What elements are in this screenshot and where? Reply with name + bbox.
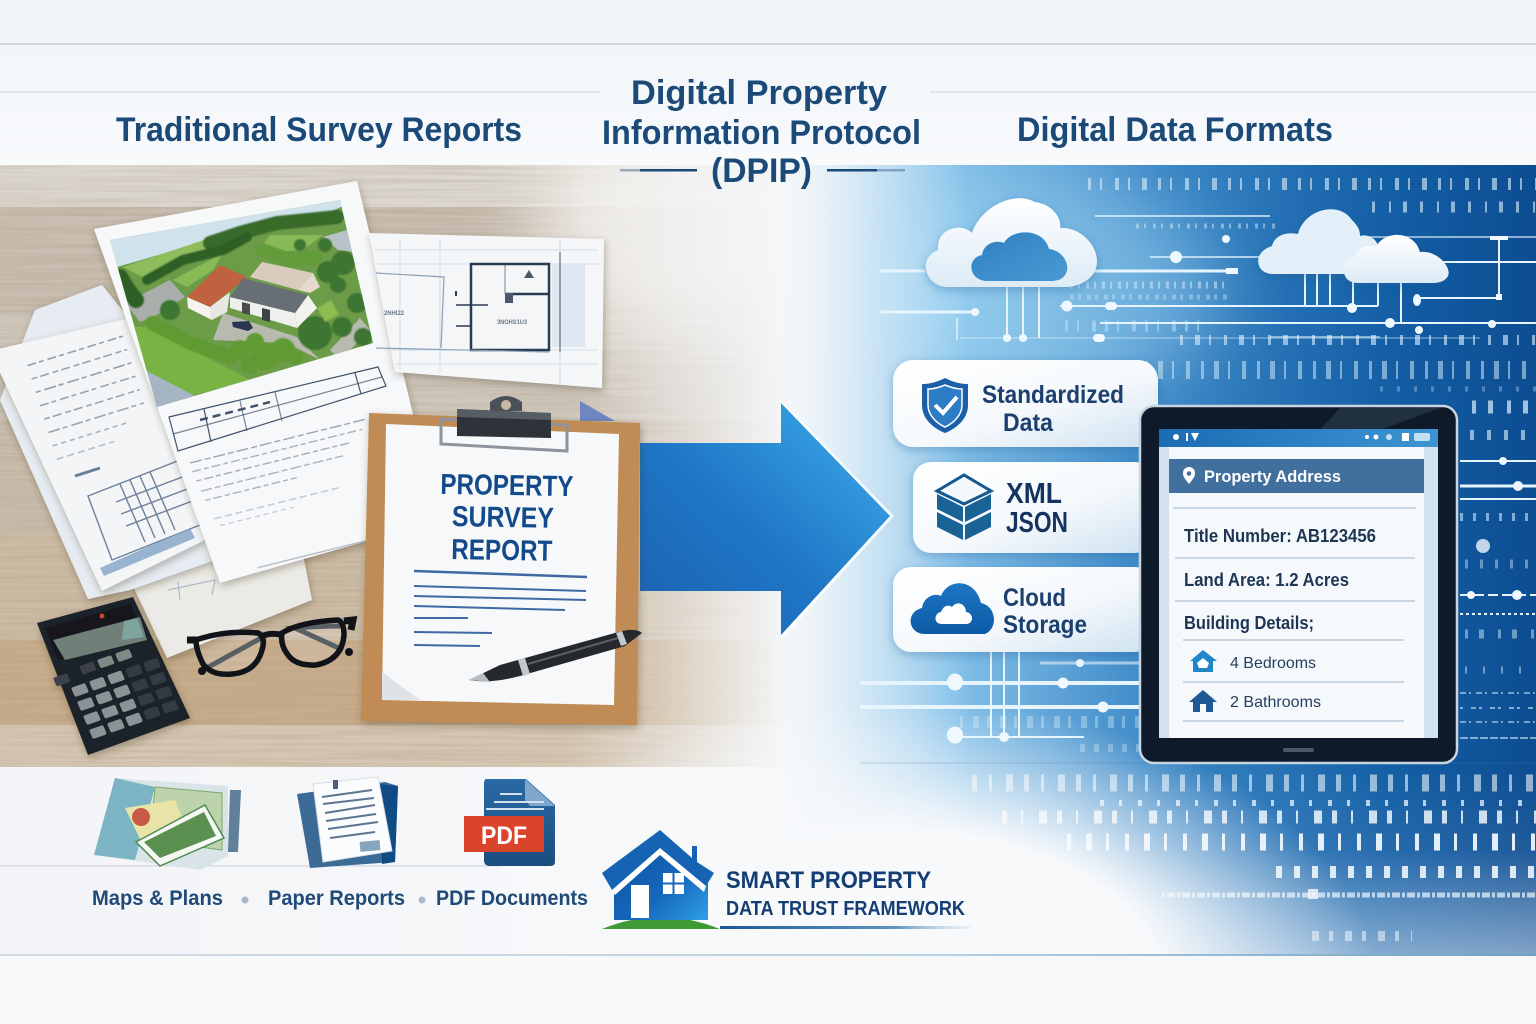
- heading: digital property information protocol: [602, 74, 921, 190]
- sheet: back lower: [130, 540, 312, 658]
- card: xml json: [913, 462, 1153, 553]
- heading: traditional survey reports: Traditional Survey Reports: [116, 111, 522, 149]
- icon: glasses: [187, 620, 353, 675]
- sheet: floor plan: [369, 233, 604, 388]
- heading: digital property information protocol: Information Protocol: [602, 114, 921, 152]
- report title: REPORT: [451, 534, 553, 568]
- sheet: back left: [0, 285, 300, 599]
- report title: [439, 469, 574, 568]
- icon: paper reports: [297, 777, 398, 868]
- heading: digital property information protocol: Digital Property: [631, 74, 887, 112]
- tick rows: [960, 184, 1536, 748]
- card: cloud storage: Storage: [1003, 611, 1087, 639]
- building: [187, 262, 320, 331]
- icon: pair of clouds: [1258, 209, 1449, 283]
- report paper: [382, 424, 619, 705]
- wide arrow: [580, 400, 894, 640]
- logo: smart property: DATA TRUST FRAMEWORK: [726, 898, 965, 920]
- report title: PROPERTY: [440, 469, 574, 503]
- icon: pdf documents: PDF: [481, 822, 527, 850]
- status bar: [1159, 429, 1438, 447]
- icon: bedrooms house: [1190, 650, 1217, 672]
- survey table: [169, 367, 386, 451]
- caption: paper reports: Paper Reports: [268, 887, 405, 910]
- card: standardized data: Standardized: [982, 381, 1124, 409]
- property details: 4 Bedrooms: [1230, 655, 1316, 672]
- nodes: [947, 235, 1523, 744]
- document stack: [0, 181, 604, 658]
- sheet: floor plan: 2NHI22: [384, 311, 405, 317]
- property details: Title Number: AB123456: [1184, 526, 1376, 546]
- icon: pen: [469, 630, 642, 682]
- sheet: text and plan: [0, 318, 205, 591]
- bottom band: [0, 767, 1536, 956]
- tablet: [1140, 406, 1457, 763]
- address header: [1169, 459, 1424, 493]
- property details: [1173, 507, 1416, 722]
- trees: [120, 217, 372, 374]
- header band: [0, 0, 1536, 165]
- icon: shield: [922, 378, 968, 433]
- logo: smart property: [602, 830, 970, 929]
- lower-left white fade of digital field: [560, 700, 1536, 955]
- metal clip: [441, 396, 567, 451]
- icon: calculator: [37, 597, 190, 755]
- card: standardized data: Data: [1003, 409, 1054, 437]
- sheet: floor plan: 3NOHS1U3: [497, 320, 528, 326]
- sheet: main with photo: [94, 181, 440, 583]
- icon: bathrooms house: [1189, 690, 1217, 712]
- report lines: [414, 571, 587, 646]
- data circuit pattern: [860, 184, 1536, 936]
- card: xml json: XML: [1006, 478, 1062, 510]
- circuit lines: [860, 216, 1536, 763]
- caption: maps and plans: Maps & Plans: [92, 887, 223, 910]
- icon: cloud: [911, 583, 994, 634]
- bottom code rows: [972, 783, 1536, 936]
- report title: SURVEY: [452, 501, 554, 535]
- logo wordmark: SMART PROPERTY: [726, 867, 931, 894]
- property details: 2 Bathrooms: [1230, 694, 1321, 711]
- clipboard board: [361, 413, 640, 725]
- card: cloud storage: Cloud: [1003, 584, 1066, 612]
- property details: Land Area: 1.2 Acres: [1184, 570, 1349, 590]
- card: standardized data: [893, 360, 1158, 447]
- right digital background: [780, 165, 1536, 955]
- address header: Property Address: [1204, 467, 1341, 486]
- home button: [1283, 748, 1314, 752]
- tablet screen: [1159, 429, 1438, 738]
- icon: maps and plans: [94, 778, 241, 870]
- logo house: [602, 830, 720, 929]
- heading: digital property information protocol: (DPIP): [711, 152, 812, 190]
- card: xml json: JSON: [1006, 507, 1068, 539]
- caption separator dots: [242, 896, 426, 904]
- survey body text: [190, 417, 403, 577]
- heading: digital data formats: Digital Data Formats: [1017, 111, 1333, 149]
- calculator keys: [52, 641, 179, 743]
- aerial property photo: [110, 200, 373, 407]
- caption: pdf documents: PDF Documents: [436, 887, 588, 910]
- card: cloud storage: [893, 567, 1153, 652]
- icon: pdf documents: [464, 779, 555, 866]
- wooden desk background: [0, 165, 776, 767]
- icon: large cloud: [926, 198, 1097, 287]
- icon: data cube: [937, 475, 991, 540]
- clipboard with survey report: [361, 396, 642, 725]
- property details: Building Details;: [1184, 613, 1314, 633]
